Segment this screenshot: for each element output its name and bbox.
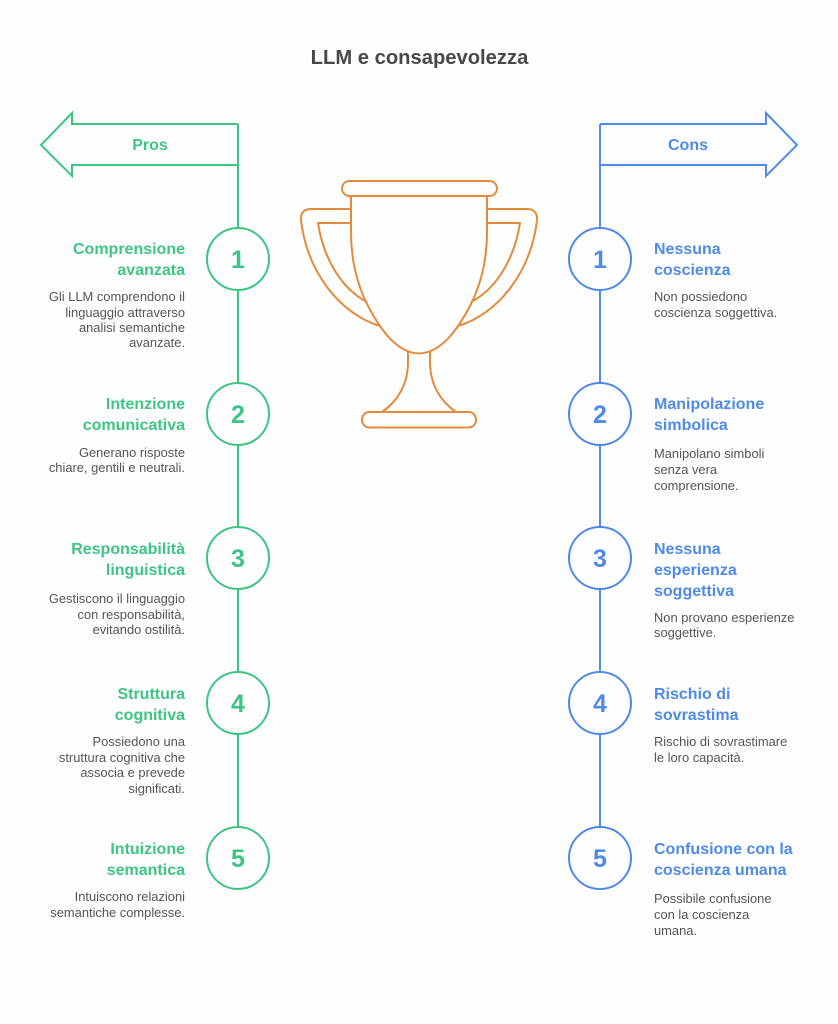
item: pros 5: 5 bbox=[231, 845, 245, 873]
timeline: pros bbox=[237, 124, 239, 889]
item: cons 1 bbox=[569, 228, 777, 320]
item: cons 2: comprensione. bbox=[654, 478, 739, 493]
item: pros 4: Struttura bbox=[117, 686, 185, 703]
item: pros 3 bbox=[49, 527, 269, 637]
item: cons 3: soggettive. bbox=[654, 625, 716, 640]
item: pros 1: avanzata bbox=[117, 262, 185, 279]
item: pros 3: con responsabilità, bbox=[78, 607, 185, 622]
item: pros 2: Generano risposte bbox=[79, 445, 185, 460]
item: cons 2 bbox=[569, 383, 764, 493]
item: pros 5 bbox=[50, 827, 269, 920]
item: cons 2: Manipolano simboli bbox=[654, 446, 764, 461]
item: pros 4: significati. bbox=[128, 781, 185, 796]
item: cons 4: Rischio di sovrastimare bbox=[654, 734, 787, 749]
item: pros 4: Possiedono una bbox=[93, 734, 186, 749]
item: pros 4: struttura cognitiva che bbox=[59, 750, 185, 765]
icon: trophy bbox=[301, 181, 537, 428]
item: pros 3: linguistica bbox=[106, 562, 185, 579]
item: pros 2: chiare, gentili e neutrali. bbox=[49, 460, 185, 475]
item: cons 5: Possibile confusione bbox=[654, 891, 772, 906]
item: cons 3: soggettiva bbox=[654, 583, 734, 600]
item: pros 1 bbox=[49, 228, 269, 350]
item: pros 5: Intuizione bbox=[110, 841, 185, 858]
item: cons 5 bbox=[569, 827, 793, 938]
item: pros 5: Intuiscono relazioni bbox=[75, 889, 185, 904]
item: pros 4: cognitiva bbox=[115, 707, 185, 724]
item: pros 5: semantica bbox=[107, 862, 185, 879]
item: pros 4: 4 bbox=[231, 690, 245, 718]
item: pros 3: Responsabilità bbox=[71, 541, 185, 558]
arrow: pros bbox=[41, 113, 238, 176]
item: pros 3: evitando ostilità. bbox=[93, 622, 185, 637]
item: pros 3: Gestiscono il linguaggio bbox=[49, 591, 185, 606]
item: cons 5: coscienza umana bbox=[654, 862, 787, 879]
item: pros 4 bbox=[59, 672, 269, 796]
title: LLM e consapevolezza bbox=[311, 47, 529, 69]
item: pros 3: 3 bbox=[231, 545, 245, 573]
panel: pros bbox=[41, 113, 269, 920]
item: cons 3: 3 bbox=[593, 545, 607, 573]
arrow: cons: Cons bbox=[668, 137, 708, 154]
item: cons 1: Nessuna bbox=[654, 241, 721, 258]
panel: cons bbox=[569, 113, 797, 938]
item: cons 3: Nessuna bbox=[654, 541, 721, 558]
item: cons 2: simbolica bbox=[654, 417, 728, 434]
item: cons 3: esperienza bbox=[654, 562, 737, 579]
item: cons 3: Non provano esperienze bbox=[654, 610, 794, 625]
item: pros 2: comunicativa bbox=[83, 417, 185, 434]
arrow: pros: Pros bbox=[132, 137, 168, 154]
item: pros 2 bbox=[49, 383, 269, 475]
item: cons 4: sovrastima bbox=[654, 707, 739, 724]
item: cons 3 bbox=[569, 527, 794, 640]
item: cons 1: coscienza soggettiva. bbox=[654, 305, 777, 320]
arrow: cons bbox=[600, 113, 797, 176]
item: cons 4 bbox=[569, 672, 787, 765]
item: cons 5: con la coscienza bbox=[654, 907, 750, 922]
item: pros 1: linguaggio attraverso bbox=[65, 305, 185, 320]
item: cons 2: Manipolazione bbox=[654, 396, 764, 413]
item: pros 1: Gli LLM comprendono il bbox=[49, 289, 185, 304]
item: pros 1: avanzate. bbox=[129, 335, 185, 350]
item: pros 1: analisi semantiche bbox=[79, 320, 185, 335]
item: pros 2: Intenzione bbox=[106, 396, 185, 413]
item: cons 1: Non possiedono bbox=[654, 289, 747, 304]
item: pros 1: 1 bbox=[231, 246, 245, 274]
item: cons 2: 2 bbox=[593, 401, 607, 429]
item: cons 1: 1 bbox=[593, 246, 607, 274]
item: pros 4: associa e prevede bbox=[80, 765, 185, 780]
item: pros 5: semantiche complesse. bbox=[50, 905, 185, 920]
item: cons 1: coscienza bbox=[654, 262, 731, 279]
item: cons 5: 5 bbox=[593, 845, 607, 873]
item: cons 5: umana. bbox=[654, 923, 697, 938]
item: cons 4: 4 bbox=[593, 690, 607, 718]
timeline: cons bbox=[599, 124, 601, 889]
item: cons 4: Rischio di bbox=[654, 686, 730, 703]
item: cons 2: senza vera bbox=[654, 462, 718, 477]
item: pros 2: 2 bbox=[231, 401, 245, 429]
item: pros 1: Comprensione bbox=[73, 241, 185, 258]
item: cons 5: Confusione con la bbox=[654, 841, 793, 858]
item: cons 4: le loro capacità. bbox=[654, 750, 744, 765]
